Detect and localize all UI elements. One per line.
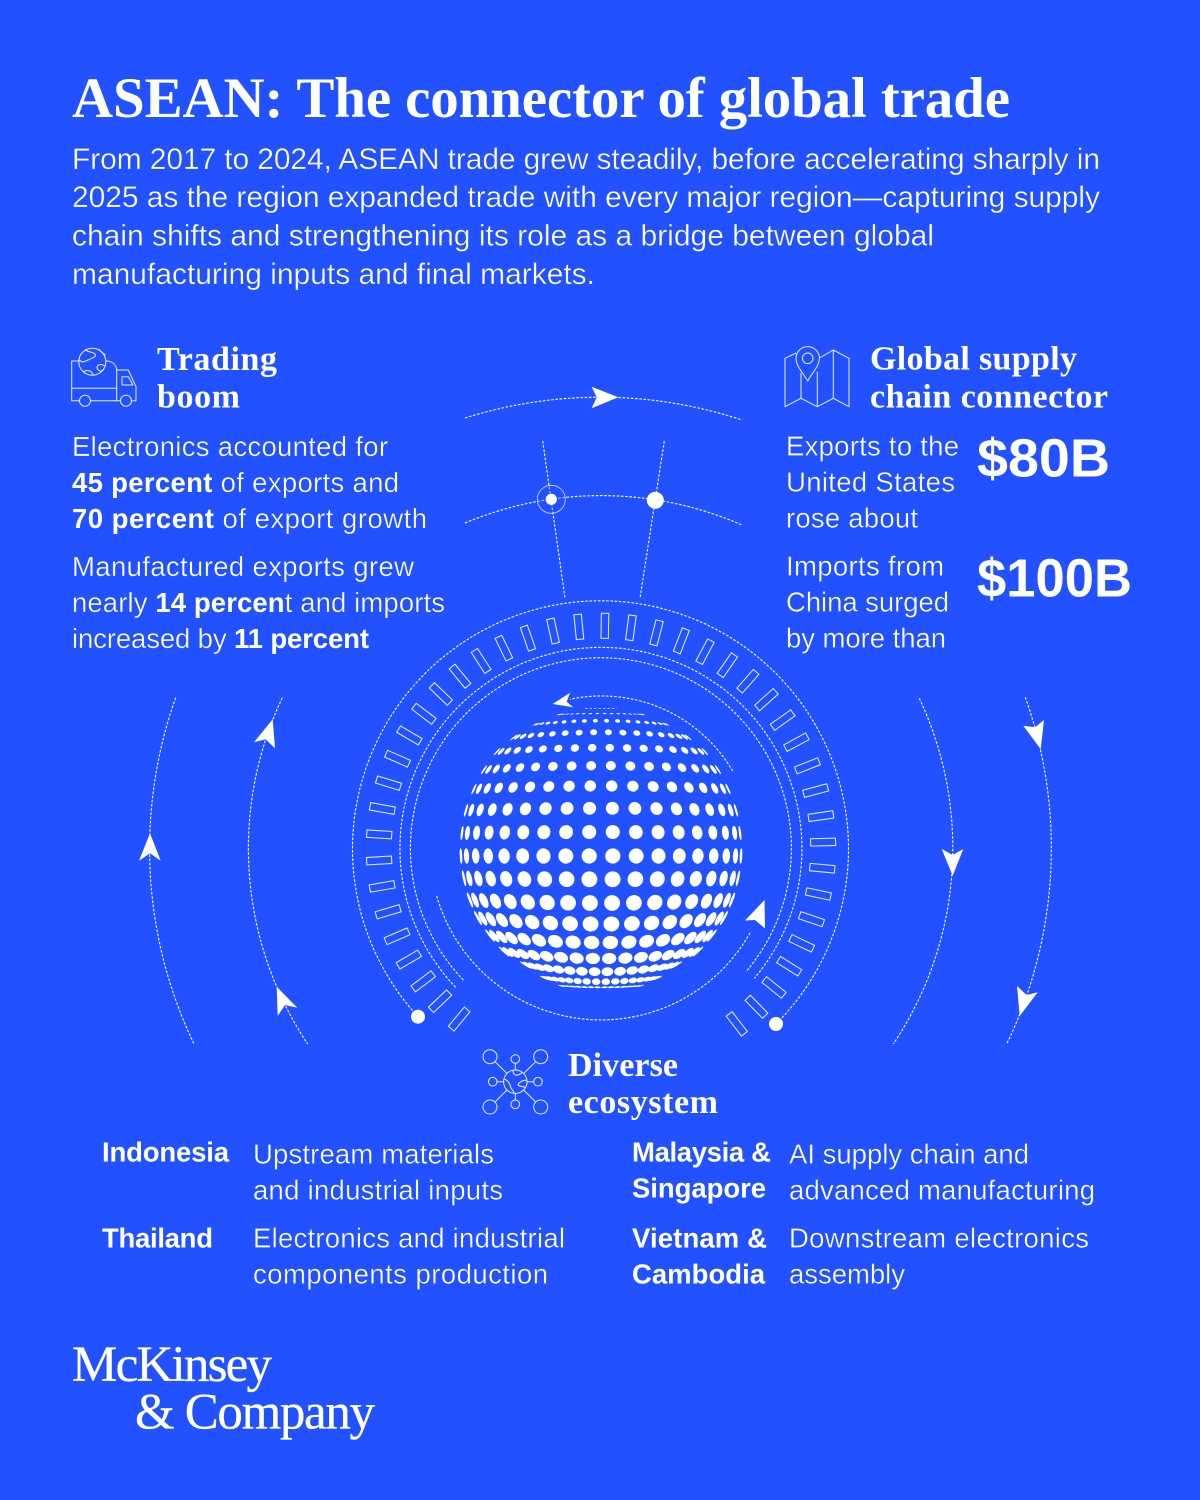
text block: trading boom facts: Manufactured exports grew [72,551,414,582]
intro paragraph: From 2017 to 2024, ASEAN trade grew steadily, before accelerating sharply in [72,143,1100,176]
icon: delivery truck with globe [72,348,136,406]
text block: imports from China: by more than [786,623,946,654]
heading: trading boom [157,341,277,416]
intro paragraph: manufacturing inputs and final markets. [72,258,595,291]
text block: trading boom facts: Electronics accounted for [72,431,388,462]
intro paragraph [72,143,1100,291]
country: Indonesia: Upstream materials [253,1138,494,1169]
orbit arcs around globe with arrows [437,693,765,1020]
heading: global supply chain connector: Global supply [870,340,1077,378]
text block: imports from China: China surged [786,587,949,618]
country: Malaysia and Singapore: Malaysia & [632,1136,771,1168]
country: Indonesia: Indonesia [102,1137,230,1168]
ring: dotted outer arc and end nodes [352,601,848,1031]
country: Vietnam and Cambodia [632,1222,1089,1290]
icon: network globe [483,1050,548,1114]
country: Thailand: Thailand [102,1222,213,1253]
text block: exports to the United States: Exports to the [786,431,959,462]
intro paragraph: 2025 as the region expanded trade with every major region—capturing supply [72,181,1100,214]
country: Vietnam and Cambodia: Downstream electronics [789,1222,1089,1253]
heading: global supply chain connector [870,340,1108,415]
country: Indonesia [102,1137,503,1205]
connector arc with nodes [465,441,742,598]
title: ASEAN: The connector of global trade [72,67,1010,130]
text block: exports to the United States [786,431,959,534]
country: Malaysia and Singapore: Singapore [632,1172,766,1204]
heading: trading boom: Trading [157,341,277,378]
text block: trading boom facts: increased by 11 percent [72,623,369,654]
country: Malaysia and Singapore: AI supply chain and [789,1138,1029,1169]
country: Indonesia: and industrial inputs [253,1174,503,1205]
country: Malaysia and Singapore: advanced manufacturing [789,1174,1095,1205]
text block: imports from China [786,551,949,654]
text block: trading boom facts [72,431,445,654]
stat: $80B: $80B [977,429,1110,489]
intro paragraph: chain shifts and strengthening its role as a bridge between global [72,220,934,252]
heading: global supply chain connector: chain connector [870,378,1108,415]
icon: folded map with pin [785,347,849,407]
country: Malaysia and Singapore [632,1136,1095,1205]
country: Thailand [102,1222,565,1289]
text block: imports from China: Imports from [786,551,944,582]
logo: McKinsey & Company: & Company [135,1384,376,1440]
logo: McKinsey & Company [72,1337,376,1440]
country: Thailand: components production [253,1258,548,1289]
text block: exports to the United States: rose about [786,503,918,534]
country: Vietnam and Cambodia: assembly [789,1258,905,1289]
dotted globe [460,708,742,988]
heading: diverse ecosystem: ecosystem [568,1084,718,1121]
ring: tick marks [366,613,836,1036]
country: Thailand: Electronics and industrial [253,1222,565,1253]
text block: exports to the United States: United States [786,467,955,498]
logo: McKinsey & Company: McKinsey [72,1337,272,1393]
text block: trading boom facts: 45 percent of exports and [72,467,399,498]
country: Vietnam and Cambodia: Cambodia [632,1258,766,1290]
heading: trading boom: boom [157,379,240,416]
stat: $100B: $100B [977,549,1132,609]
heading: diverse ecosystem [568,1047,718,1121]
left flow arcs with arrows [139,698,308,1044]
top flow arc with arrow [465,387,742,420]
right flow arcs with arrows [893,697,1051,1044]
text block: trading boom facts: nearly 14 percent and imports [72,587,445,618]
heading: diverse ecosystem: Diverse [568,1047,678,1084]
text block: trading boom facts: 70 percent of export growth [72,503,427,534]
country: Vietnam and Cambodia: Vietnam & [632,1222,767,1254]
